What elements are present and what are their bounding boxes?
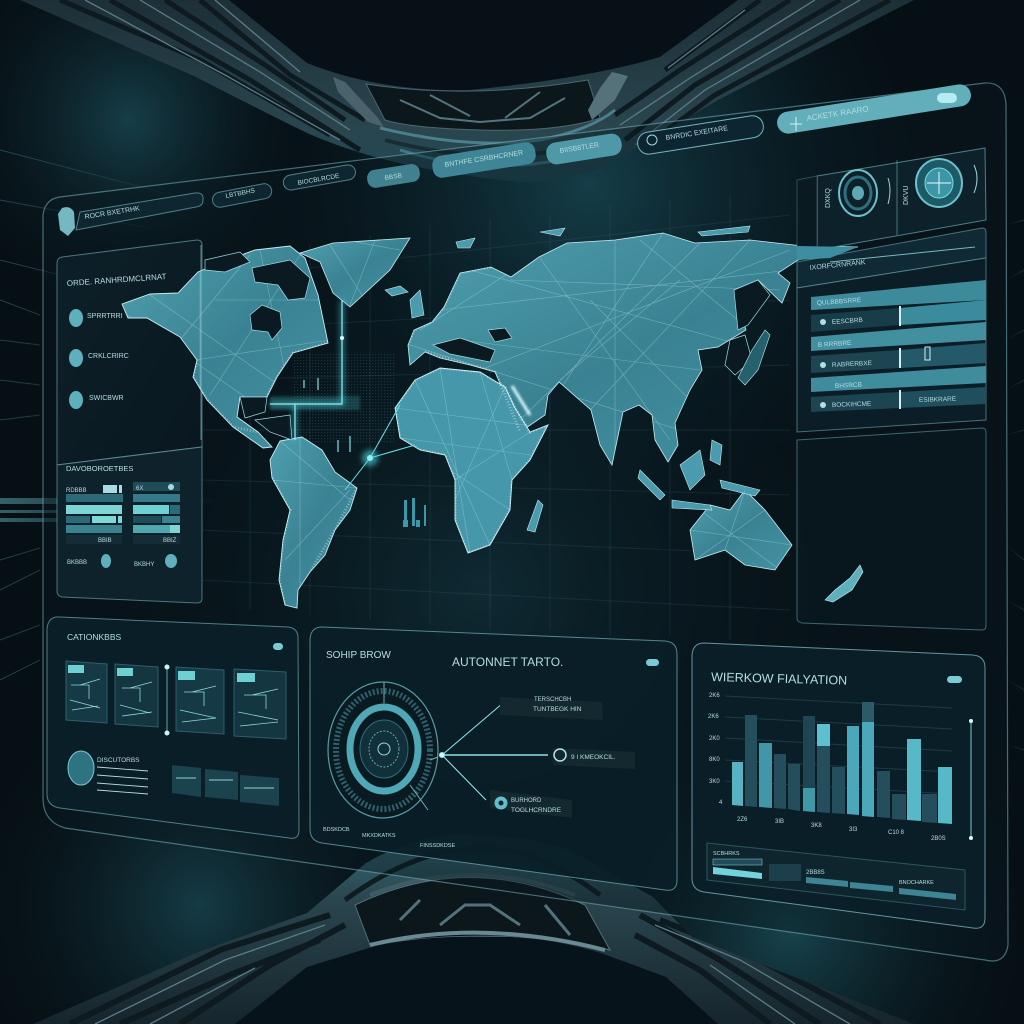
- side data streaks: [0, 150, 1024, 750]
- callout 3: BURHORD: [511, 798, 542, 804]
- summary strip: [707, 843, 965, 910]
- table: left column: [66, 485, 123, 544]
- pill: tab 6: BNRDIC EXEITARE: [665, 125, 729, 142]
- pill: tab 2: BIOCBLRCDE: [297, 173, 341, 187]
- row 1: QULBBBSRRE: [817, 297, 862, 307]
- table: right column: BBIZ: [163, 538, 177, 544]
- x axis labels: [737, 817, 946, 842]
- network mesh: [120, 233, 792, 608]
- table: right column: [133, 482, 180, 544]
- inland seas: [205, 252, 770, 440]
- x axis labels: 2B0S: [931, 836, 946, 842]
- red sea glow: [512, 386, 530, 415]
- y axis labels: 2K0: [709, 736, 720, 742]
- thumbnail 4: [234, 669, 286, 739]
- russia tip over panel: [797, 246, 858, 260]
- plate left: [333, 77, 384, 127]
- status dot: [273, 643, 283, 650]
- eurasia: [408, 233, 858, 465]
- x axis labels: C10 8: [888, 830, 905, 836]
- status row 1: SPRRTRRI: [87, 313, 123, 320]
- gauge 2: [903, 159, 977, 207]
- left panel edge over map: [200, 245, 202, 440]
- pill: header: [58, 193, 203, 236]
- islands: [385, 226, 760, 532]
- machinery: bottom band: [33, 835, 914, 1024]
- pill: tab 1: [211, 182, 273, 209]
- pill: tab 3: [366, 163, 421, 189]
- row 3: [811, 322, 986, 351]
- panel: ranked list: [797, 258, 986, 432]
- callout 2: [553, 748, 635, 769]
- callout 1: TERSCHCBH: [534, 697, 571, 703]
- footer labels: MKXDKATKS: [362, 833, 396, 839]
- status row 2: CRKLCRIRC: [88, 353, 129, 360]
- summary strip: 2BB8S: [806, 870, 825, 876]
- footer labels: [323, 827, 455, 849]
- australia: [690, 490, 792, 570]
- japan: [738, 330, 770, 385]
- plate right: [588, 72, 628, 120]
- pill: header: ROCR BXETRHK: [84, 205, 141, 221]
- pill: tab 4: BNTHFE CSRBHCRNER: [444, 150, 524, 169]
- coast texture: [193, 267, 548, 605]
- heading: left: SOHIP BROW: [326, 650, 391, 661]
- north america: [122, 246, 328, 448]
- callout 1: [500, 697, 603, 720]
- panel: captures: [47, 617, 299, 838]
- heading: chart: WIERKOW FIALYATION: [711, 670, 847, 688]
- panel: compass: [797, 148, 986, 254]
- thumbnail 1: [66, 661, 107, 723]
- pill: tab 3: BBSB: [384, 172, 402, 182]
- top pills: [58, 83, 973, 236]
- panel: left data: [57, 447, 202, 603]
- status row 3: [69, 391, 124, 409]
- slider: [164, 664, 170, 736]
- data footer: [67, 554, 177, 568]
- row 6: BOCKIHCME: [832, 401, 872, 409]
- panel: bar chart: [692, 643, 985, 928]
- row 5: BHSRCB: [835, 382, 862, 390]
- callout 3: TOGLHCRNDRE: [511, 807, 562, 814]
- status dot: [947, 676, 962, 683]
- halftone patch: [270, 352, 396, 444]
- row 6: [811, 387, 986, 412]
- gauge 1: DXKQ: [825, 188, 832, 208]
- map grid: [200, 195, 790, 640]
- thumbnail 2: [115, 664, 158, 727]
- row 4: [811, 343, 986, 373]
- footer labels: FINSSDKDSE: [420, 843, 455, 849]
- status row 1: [69, 309, 123, 327]
- heading: status: ORDE. RANHRDMCLRNAT: [67, 272, 167, 288]
- gridlines: [725, 696, 952, 794]
- heading: data: DAVOBOROETBES: [66, 464, 133, 473]
- mini bar glyph: [403, 498, 426, 527]
- mini cards: [172, 765, 279, 806]
- thumbnail 3: [176, 667, 224, 734]
- world map: [120, 226, 858, 608]
- bars: [732, 702, 952, 824]
- y axis labels: 8K0: [709, 757, 720, 763]
- pill: tab 1: LBTBBHS: [225, 187, 256, 200]
- greenland: [300, 238, 410, 307]
- panel: search bar: [797, 228, 986, 288]
- emblem and lines: [68, 751, 148, 794]
- gauge 2: DKVU: [903, 186, 910, 205]
- summary strip: BNOCHARKE: [899, 880, 934, 886]
- table: right column: 6X: [136, 486, 143, 492]
- status row 3: SWICBWR: [89, 395, 124, 402]
- row 3: B RRRBRE: [818, 340, 852, 349]
- callout 2: 9 I KMEOKCIL.: [571, 754, 616, 761]
- pill: tab 2: [282, 164, 357, 191]
- pill: search: ACKETK RAARO: [806, 104, 869, 123]
- row 2: [811, 300, 986, 332]
- row 5: [811, 366, 986, 392]
- data footer: BKBBB: [67, 560, 87, 566]
- panel: empty right: [797, 428, 986, 630]
- callout 3: [490, 790, 572, 818]
- machinery: top band: [20, 0, 914, 182]
- summary strip: SCBHRKS: [713, 851, 740, 857]
- africa: [395, 368, 548, 553]
- pill: tab 5: BIISB8TLER: [559, 142, 600, 155]
- y axis labels: 2K6: [709, 693, 720, 699]
- y axis labels: [708, 693, 723, 806]
- row 4: RABRERBXE: [832, 360, 873, 369]
- row 6: ESIBKRARE: [919, 396, 957, 404]
- range slider: [969, 719, 973, 840]
- data footer: BKBHY: [134, 562, 154, 568]
- table: left column: BBIB: [98, 538, 112, 544]
- y axis labels: 3K0: [709, 779, 720, 785]
- x axis labels: 2Z6: [737, 817, 748, 823]
- row 1: [811, 280, 986, 310]
- emblem and lines: DISCUTORBS: [97, 757, 140, 764]
- x axis labels: 3IB: [775, 819, 784, 825]
- y axis labels: 2K6: [708, 714, 719, 720]
- callout 1: TUNTBEGK HIN: [533, 706, 582, 713]
- x axis labels: 3I3: [849, 827, 858, 833]
- pill: tab 5: [545, 132, 623, 166]
- panel: autonomy: [310, 627, 677, 890]
- pill: tab 6: [636, 114, 765, 156]
- connectors: [440, 703, 548, 800]
- row 2: EESCBRB: [832, 317, 863, 326]
- status row 2: [69, 349, 129, 367]
- table: left column: RDBBB: [66, 488, 87, 494]
- pill: search: [775, 83, 973, 135]
- pill: tab 4: [431, 141, 537, 179]
- new zealand over panel: [825, 565, 863, 602]
- panel: search bar: IXORFCRNRANK: [809, 259, 866, 272]
- y axis labels: 4: [719, 800, 723, 806]
- footer labels: BDSKDCB: [323, 827, 350, 833]
- south america: [270, 437, 357, 608]
- heading: captures: CATIONKBBS: [67, 632, 121, 642]
- connection lines: [270, 300, 415, 490]
- x axis labels: 3K8: [811, 823, 822, 829]
- status dot: [646, 659, 659, 666]
- radial gauge: [328, 682, 438, 818]
- panel: left status: [57, 240, 202, 465]
- gauge 1: [825, 170, 890, 216]
- heading: right: AUTONNET TARTO.: [452, 655, 563, 669]
